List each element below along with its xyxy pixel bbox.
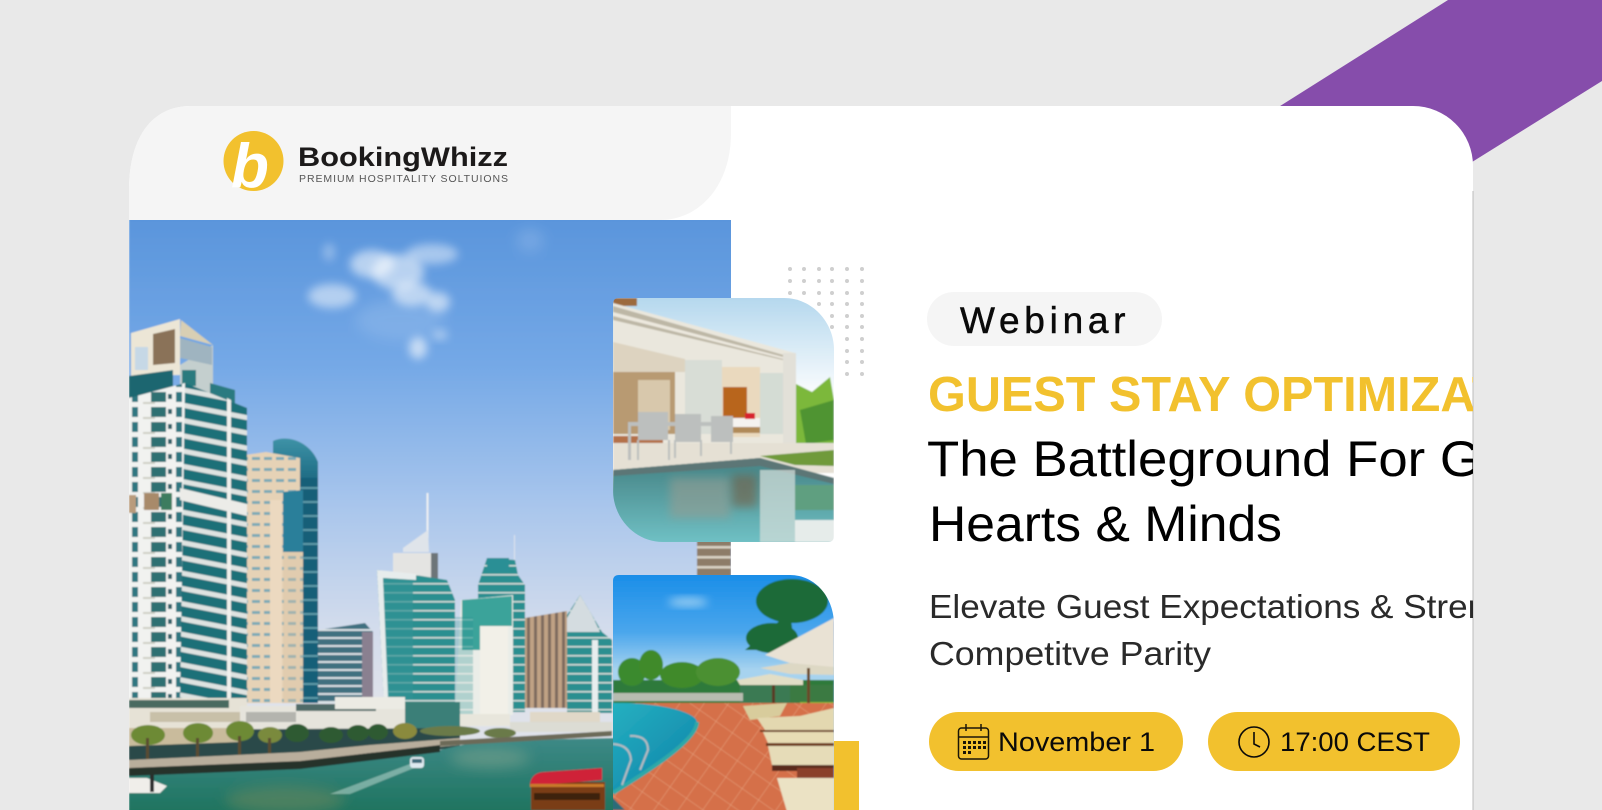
webinar title — [928, 440, 1473, 542]
dark shopfront band — [129, 728, 461, 761]
icon: clock — [1239, 727, 1269, 757]
resort pool photo — [610, 572, 838, 810]
webinar title: The Battleground For Guests' — [927, 431, 1602, 487]
white moored boat — [129, 775, 167, 793]
dark teal curved tower — [273, 439, 318, 703]
webinar pill: Webinar — [960, 300, 1128, 341]
palm trees — [131, 721, 516, 762]
logo header panel — [129, 106, 731, 220]
icon: calendar — [958, 724, 988, 759]
resort villa photo — [610, 295, 838, 545]
clouds — [308, 228, 544, 359]
subtitle: Competitve Parity — [929, 635, 1212, 672]
white and teal front building — [455, 595, 513, 716]
umbrellas — [765, 618, 834, 668]
time pill: 17:00 CEST — [1280, 727, 1430, 757]
BookingWhizz logo — [224, 131, 508, 201]
logo mark: b — [231, 132, 269, 201]
teal glass tower with spire — [377, 493, 455, 723]
villa facade — [613, 303, 795, 448]
date pill: November 1 — [998, 727, 1155, 757]
brand name: BookingWhizz — [298, 142, 508, 172]
background purple diagonal band — [1250, 0, 1602, 182]
time pill — [1208, 712, 1460, 771]
tree line — [613, 680, 834, 704]
yellow accent block — [834, 741, 859, 810]
quay wall — [129, 738, 460, 769]
palm crown — [745, 579, 828, 653]
date pill — [929, 712, 1183, 771]
subtitle — [930, 594, 1473, 672]
shopping podium — [129, 696, 612, 761]
event heading: GUEST STAY OPTIMIZATION — [928, 368, 1588, 422]
pool ladder — [613, 736, 648, 785]
tagline: PREMIUM HOSPITALITY SOLTUIONS — [299, 173, 508, 185]
small speedboat — [410, 757, 424, 768]
dotted decoration — [788, 267, 864, 376]
last teal tower — [567, 595, 612, 713]
white card — [129, 106, 1473, 810]
water — [129, 737, 613, 810]
logo mark — [224, 131, 284, 201]
tall white tower — [129, 319, 247, 705]
background tower between inset photos — [696, 542, 731, 575]
grey teal mid building — [318, 623, 373, 703]
subtitle: Elevate Guest Expectations & Strengthen — [929, 588, 1575, 625]
webinar pill — [927, 292, 1162, 346]
pool — [610, 458, 834, 545]
webinar title: Hearts & Minds — [929, 496, 1282, 552]
deck tiles — [610, 703, 834, 810]
brown tower — [525, 611, 567, 708]
main photo: marina skyline — [129, 215, 740, 810]
beige tower — [240, 452, 303, 703]
red tour boat — [530, 768, 605, 810]
patio — [613, 443, 834, 473]
far teal tower — [478, 535, 525, 712]
tropical foliage — [796, 377, 834, 444]
wake — [330, 764, 414, 794]
text clipped at card edge — [928, 376, 1473, 672]
chairs and table — [628, 412, 733, 460]
pool water — [610, 703, 697, 795]
sun loungers — [743, 703, 834, 810]
